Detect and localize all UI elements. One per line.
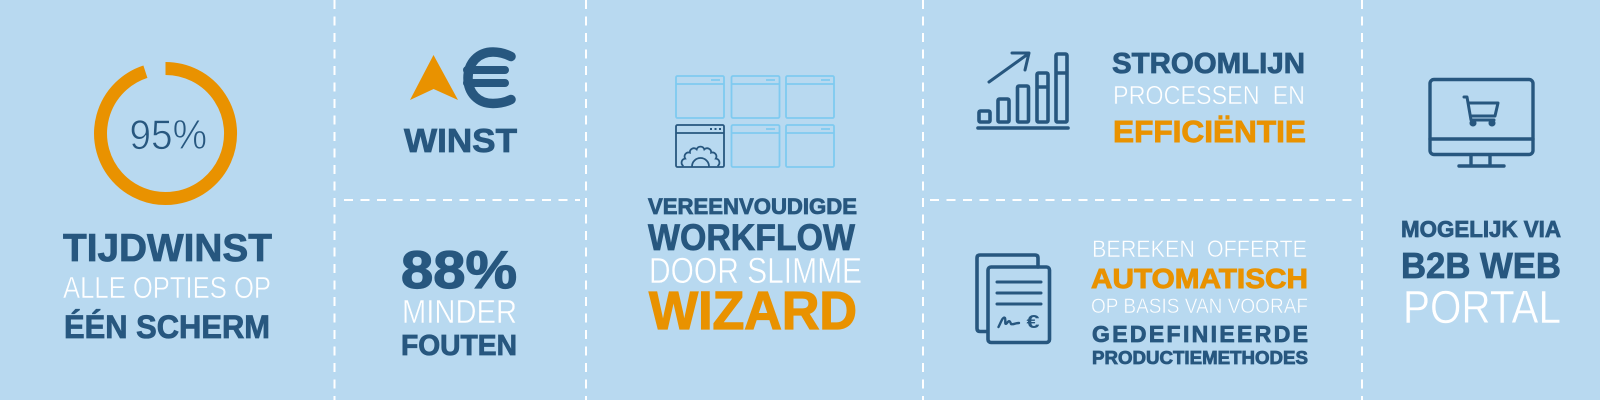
icon: euro sign xyxy=(467,52,511,104)
panel: b2b web portal xyxy=(1401,80,1561,333)
stat: 88%: 88% xyxy=(401,241,517,300)
heading: winst: WINST xyxy=(404,123,518,160)
heading: efficientie: EFFICIËNTIE xyxy=(1113,115,1306,149)
text: productiemethodes: PRODUCTIEMETHODES xyxy=(1092,347,1308,368)
text: processen en: PROCESSEN EN xyxy=(1113,80,1305,110)
donut value: 95% xyxy=(130,111,207,158)
text: mogelijk via: MOGELIJK VIA xyxy=(1401,216,1561,242)
text: alle opties op: ALLE OPTIES OP xyxy=(63,270,271,305)
text: door slimme: DOOR SLIMME xyxy=(649,250,862,291)
icon: monitor with cart xyxy=(1430,80,1533,166)
text: bereken offerte: BEREKEN OFFERTE xyxy=(1092,236,1307,263)
icon: window grid with gear xyxy=(676,76,834,167)
text: fouten: FOUTEN xyxy=(401,330,517,362)
icon: rising bar chart xyxy=(978,53,1068,128)
chart: 95% donut ring xyxy=(101,68,231,198)
text: portal: PORTAL xyxy=(1403,281,1561,333)
icon: documents with euro xyxy=(977,255,1050,342)
heading: tijdwinst: TIJDWINST xyxy=(63,227,272,270)
text: minder: MINDER xyxy=(402,293,517,330)
panel: fewer errors xyxy=(401,241,517,362)
text: vereenvoudigde: VEREENVOUDIGDE xyxy=(648,194,857,219)
text: gedefinieerde: GEDEFINIEERDE xyxy=(1092,321,1308,347)
icon: documents with euro: € xyxy=(1026,312,1040,332)
heading: workflow: WORKFLOW xyxy=(648,216,856,258)
panel: automatic quote xyxy=(977,236,1308,368)
panel: profit xyxy=(404,52,518,160)
text: een scherm: ÉÉN SCHERM xyxy=(64,309,270,345)
heading: automatisch: AUTOMATISCH xyxy=(1091,263,1308,294)
panel: streamline processes xyxy=(978,48,1306,149)
icon: up arrow xyxy=(410,55,458,100)
heading: wizard: WIZARD xyxy=(649,281,857,341)
heading: b2b web: B2B WEB xyxy=(1401,245,1561,286)
panel: time savings xyxy=(63,68,272,345)
text: op basis van vooraf: OP BASIS VAN VOORAF xyxy=(1091,295,1308,318)
panel: simplified workflow xyxy=(648,76,862,341)
heading: stroomlijn: STROOMLIJN xyxy=(1112,48,1305,80)
